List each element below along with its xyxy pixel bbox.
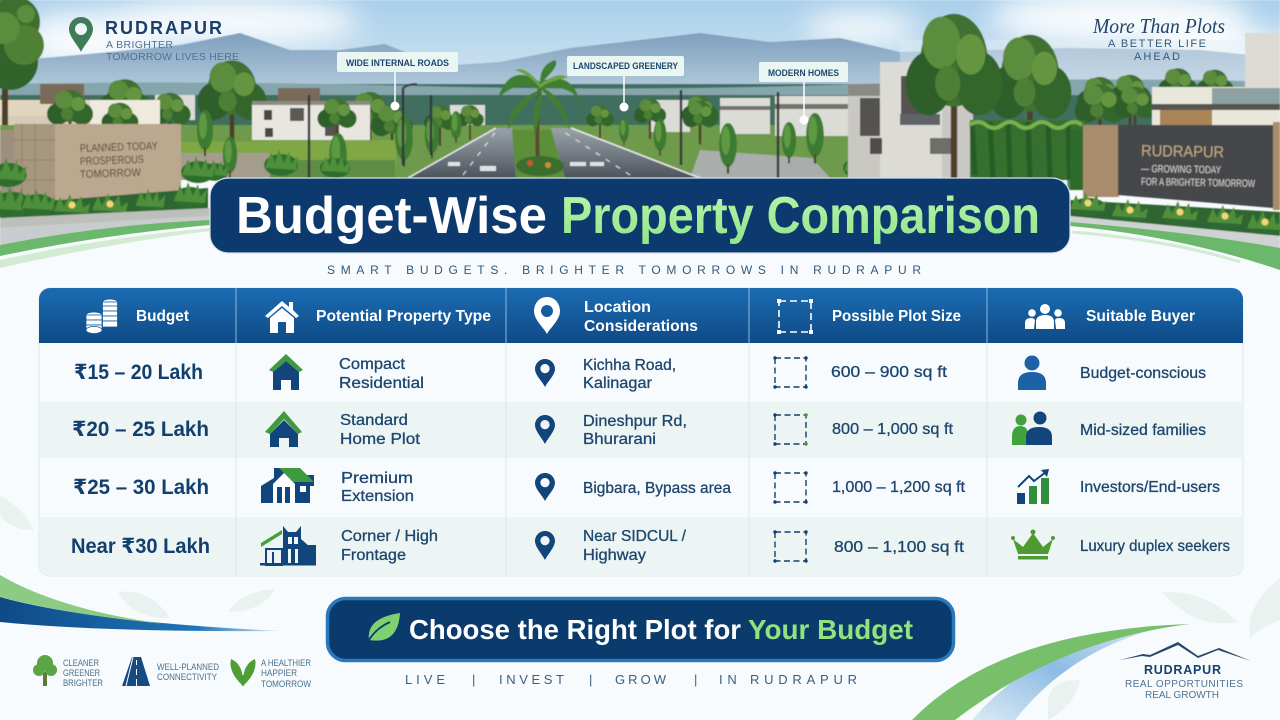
distant houses [155, 95, 848, 136]
left kerb and pavement [0, 208, 210, 228]
wall text: PLANNED TODAY [80, 140, 159, 155]
tagline: More Than Plots: AHEAD [1134, 51, 1180, 63]
icon: premium house [261, 468, 314, 503]
right kerb and pavement [1070, 216, 1280, 250]
live invest grow strapline [405, 672, 857, 687]
row 4: Near ₹30 Lakh: Near ₹30 Lakh [71, 535, 210, 558]
header: budget: Budget [136, 308, 190, 325]
header: property type: Potential Property Type [316, 308, 491, 325]
icon: coins [86, 299, 118, 334]
row 1: ₹15 – 20 Lakh [74, 354, 1206, 392]
row 3: ₹25 – 30 Lakh: ₹25 – 30 Lakh [73, 476, 209, 499]
far trees [100, 60, 1233, 159]
logo: Rudrapur real opportunities: REAL OPPORTUNITIES [1125, 679, 1243, 690]
row 2: ₹20 – 25 Lakh: 800 – 1,000 sq ft [832, 421, 954, 438]
benefit: well-planned connectivity: WELL-PLANNED [157, 662, 219, 672]
left houses [0, 84, 160, 149]
benefit: a healthier happier tomorrow: HAPPIER [261, 668, 297, 678]
row 2: ₹20 – 25 Lakh: Mid-sized families [1080, 422, 1206, 439]
row 3: ₹25 – 30 Lakh [73, 468, 1220, 505]
wall text: TOMORROW [80, 167, 142, 181]
live invest grow strapline: INVEST [499, 672, 564, 687]
benefit: cleaner greener brighter: BRIGHTER [63, 678, 103, 688]
table background and rows [39, 288, 1243, 576]
left swoosh [0, 220, 210, 268]
icon: standard house [265, 411, 302, 447]
icon: road [122, 657, 150, 686]
row 1: ₹15 – 20 Lakh: Budget-conscious [1080, 365, 1206, 382]
benefit: a healthier happier tomorrow: TOMORROW [261, 679, 311, 689]
row 1: ₹15 – 20 Lakh: Kalinagar [583, 375, 653, 392]
icon: leaf [365, 613, 400, 648]
row 4: Near ₹30 Lakh: Luxury duplex seekers [1080, 538, 1230, 555]
road side trees and lamps [197, 84, 939, 184]
title banner [210, 178, 1070, 253]
logo: Rudrapur real opportunities: RUDRAPUR [1144, 663, 1221, 677]
palm [498, 60, 580, 176]
icon: pin [535, 473, 555, 501]
icon: house [265, 301, 299, 333]
bottom-left swoosh [0, 575, 281, 631]
logo: Rudrapur [69, 17, 239, 63]
row 1: ₹15 – 20 Lakh: ₹15 – 20 Lakh [74, 361, 203, 384]
wall text: PROSPEROUS [80, 154, 144, 168]
row 3: ₹25 – 30 Lakh: 1,000 – 1,200 sq ft [832, 479, 966, 496]
bottom-right swoosh [912, 624, 1190, 720]
live invest grow strapline: GROW [615, 672, 667, 687]
lawn [180, 140, 396, 165]
comparison table [39, 288, 1243, 576]
benefit: cleaner greener brighter [33, 655, 103, 688]
header: location: Considerations [584, 318, 698, 335]
logo: Rudrapur: A BRIGHTER [106, 39, 173, 51]
icon: people [1025, 304, 1065, 329]
icon: plot outline [773, 471, 808, 504]
header: property type [265, 301, 491, 333]
right wall text: RUDRAPUR [1141, 143, 1224, 161]
header: location: Location [584, 299, 651, 316]
callout: modern homes [759, 62, 848, 124]
tagline: More Than Plots [1092, 14, 1225, 63]
row 3: ₹25 – 30 Lakh: Premium [341, 470, 413, 487]
icon: location pin [69, 17, 93, 52]
row 4: Near ₹30 Lakh: Corner / High [341, 528, 438, 545]
icon: pin [535, 415, 555, 444]
row 1: ₹15 – 20 Lakh: Residential [339, 375, 424, 392]
left big tree [0, 0, 44, 125]
header: budget [86, 299, 190, 334]
row 4: Near ₹30 Lakh: 800 – 1,100 sq ft [834, 539, 965, 556]
icon: family [1012, 412, 1052, 445]
left planting [0, 156, 215, 220]
logo: Rudrapur: RUDRAPUR [105, 18, 222, 38]
right wall text [1141, 143, 1255, 190]
live invest grow strapline: | [472, 672, 475, 687]
icon: sprout [230, 659, 256, 686]
icon: plot outline [773, 530, 808, 563]
logo: Rudrapur real opportunities: REAL GROWTH [1145, 690, 1219, 701]
row 4: Near ₹30 Lakh: Near SIDCUL / [583, 528, 687, 545]
row 4: Near ₹30 Lakh [71, 526, 1230, 566]
callout: landscaped greenery [567, 56, 684, 112]
decorative leaves [0, 495, 1280, 720]
row 2: ₹20 – 25 Lakh: Standard [340, 412, 408, 429]
call to action banner [328, 598, 954, 660]
subtitle: SMART BUDGETS. BRIGHTER TOMORROWS IN RUDRAPUR [327, 263, 921, 277]
icon: growth chart [1017, 469, 1049, 504]
tagline: More Than Plots: More Than Plots [1092, 14, 1225, 38]
icon: pin [535, 359, 555, 387]
callout: modern homes: MODERN HOMES [768, 68, 839, 79]
far right house [1075, 33, 1280, 148]
right planting [1070, 192, 1280, 236]
wall text [80, 140, 159, 181]
title banner: Property Comparison [561, 187, 1040, 245]
callout: wide internal roads: WIDE INTERNAL ROADS [346, 58, 449, 69]
call to action banner: Choose the Right Plot for [409, 614, 741, 645]
header: plot size [777, 299, 961, 334]
right house [848, 62, 973, 178]
row 4: Near ₹30 Lakh: Highway [583, 547, 646, 564]
row 4: Near ₹30 Lakh: Frontage [341, 547, 406, 564]
icon: plot outline [773, 356, 808, 389]
live invest grow strapline: LIVE [405, 672, 445, 687]
benefit: well-planned connectivity [122, 657, 219, 686]
header: buyer [1025, 304, 1195, 329]
logo: Rudrapur real opportunities [1120, 642, 1251, 701]
title banner: Budget-Wise [236, 187, 547, 245]
icon: plot outline [777, 299, 813, 334]
benefit: a healthier happier tomorrow: A HEALTHIER [261, 658, 311, 668]
benefit: cleaner greener brighter: CLEANER [63, 658, 99, 668]
live invest grow strapline: IN RUDRAPUR [719, 672, 857, 687]
icon: pin [535, 531, 555, 560]
row 2: ₹20 – 25 Lakh: Home Plot [340, 431, 421, 448]
mid house [252, 88, 370, 148]
callout: landscaped greenery: LANDSCAPED GREENERY [573, 61, 679, 72]
road [408, 128, 700, 178]
row 2: ₹20 – 25 Lakh: Bhurarani [583, 431, 656, 448]
benefit: a healthier happier tomorrow [230, 658, 311, 689]
left sign wall [0, 124, 181, 210]
hero scene [0, 0, 1280, 250]
logo: Rudrapur: TOMORROW LIVES HERE [106, 51, 239, 63]
live invest grow strapline: | [694, 672, 697, 687]
row 1: ₹15 – 20 Lakh: 600 – 900 sq ft [831, 364, 948, 381]
tagline: More Than Plots: A BETTER LIFE [1108, 38, 1206, 50]
icon: compact house [269, 354, 303, 390]
row 2: ₹20 – 25 Lakh: ₹20 – 25 Lakh [72, 418, 209, 441]
icon: mountains [1120, 642, 1251, 661]
header: location [534, 297, 698, 335]
row 3: ₹25 – 30 Lakh: Bigbara, Bypass area [583, 480, 731, 497]
row 1: ₹15 – 20 Lakh: Kichha Road, [583, 357, 676, 374]
row 2: ₹20 – 25 Lakh [72, 411, 1206, 448]
call to action banner: Your Budget [748, 614, 913, 645]
live invest grow strapline: | [589, 672, 592, 687]
row 3: ₹25 – 30 Lakh: Investors/End-users [1080, 479, 1220, 496]
icon: tree [33, 655, 57, 686]
benefit: cleaner greener brighter: GREENER [63, 668, 100, 678]
icon: crown [1011, 530, 1055, 560]
right wall text: — GROWING TODAY [1141, 163, 1221, 176]
right sign wall [1083, 122, 1280, 210]
row 3: ₹25 – 30 Lakh: Extension [341, 488, 414, 505]
icon: plot outline [773, 413, 808, 446]
hedge [970, 120, 1085, 190]
icon: person [1018, 356, 1046, 390]
callout: wide internal roads [337, 52, 458, 110]
right swoosh [1070, 222, 1280, 270]
icon: corner plot building [260, 526, 316, 566]
row 1: ₹15 – 20 Lakh: Compact [339, 356, 406, 373]
benefit: well-planned connectivity: CONNECTIVITY [157, 672, 217, 682]
header: plot size: Possible Plot Size [832, 308, 961, 325]
icon: pin [534, 297, 560, 334]
row 2: ₹20 – 25 Lakh: Dineshpur Rd, [583, 413, 687, 430]
big right trees [906, 14, 1071, 182]
header: buyer: Suitable Buyer [1086, 308, 1195, 325]
